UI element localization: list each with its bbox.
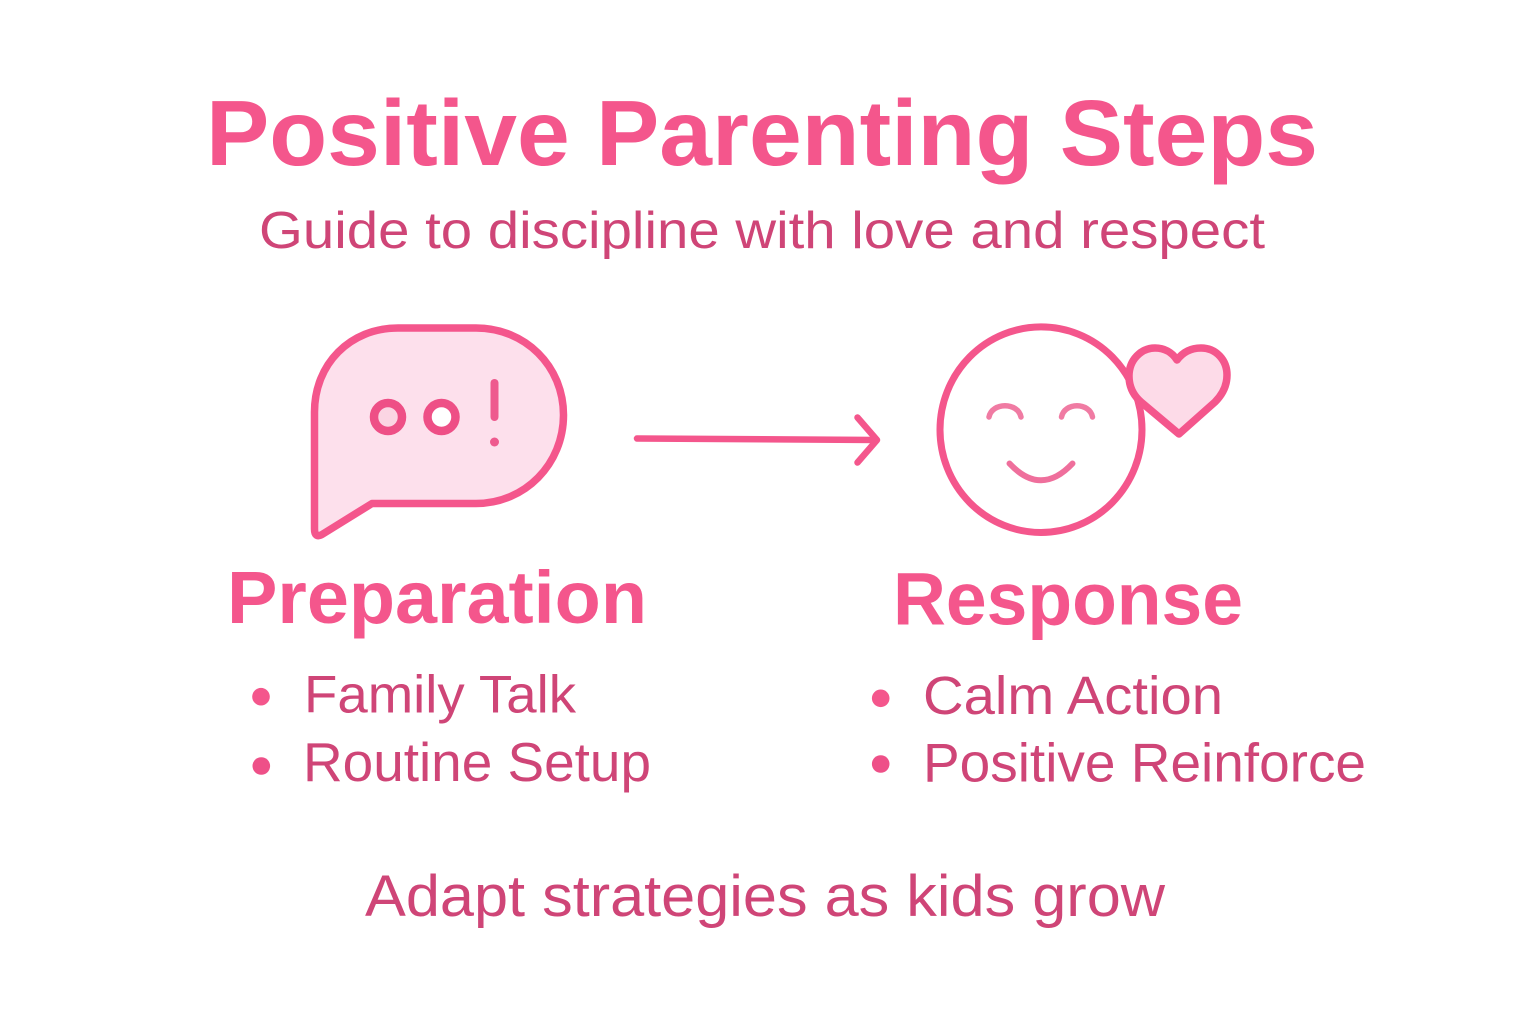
title: Positive Parenting Steps bbox=[206, 81, 1318, 185]
list: response: Positive Reinforce bbox=[923, 732, 1366, 794]
list: preparation: Routine Setup bbox=[303, 731, 651, 793]
heading: preparation: Preparation bbox=[227, 556, 647, 639]
subtitle: Guide to discipline with love and respect bbox=[259, 202, 1266, 260]
footer note: Adapt strategies as kids grow bbox=[365, 864, 1166, 929]
arrow bbox=[637, 418, 877, 462]
heading: response: Response bbox=[893, 558, 1243, 640]
list: response: Calm Action bbox=[923, 666, 1223, 726]
list: preparation bbox=[252, 666, 651, 793]
list: response bbox=[872, 666, 1366, 794]
icon: smiling face with heart bbox=[940, 327, 1227, 532]
icon: speech bubble bbox=[314, 328, 564, 536]
list: preparation: Family Talk bbox=[304, 666, 577, 724]
